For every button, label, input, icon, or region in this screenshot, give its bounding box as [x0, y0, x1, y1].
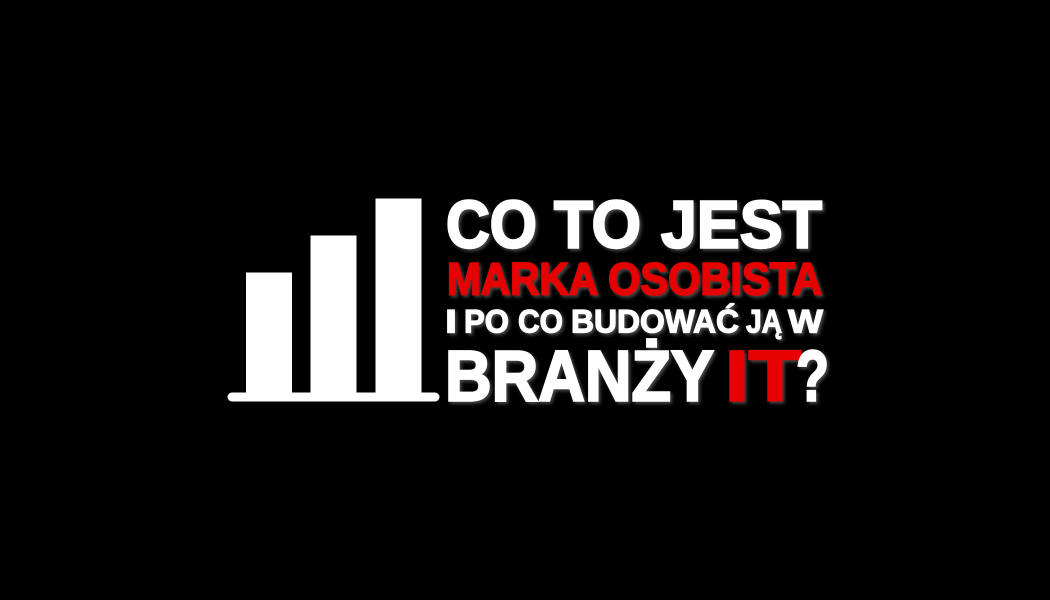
title line 3: BUDOWAĆ: [571, 302, 739, 340]
title line 2: [447, 254, 822, 304]
title line 3: JĄ: [746, 304, 782, 340]
title line 3: PO: [464, 304, 509, 340]
title line 4: ?: [796, 338, 829, 416]
title line 3: W: [788, 304, 823, 340]
title line 1: TO: [554, 188, 641, 262]
title line 3: CO: [518, 304, 563, 340]
title line 3: [445, 302, 823, 340]
title line 1: CO: [446, 188, 537, 262]
title line 3: I: [445, 304, 457, 340]
title line 1: JEST: [661, 188, 822, 262]
icon: bar chart: [228, 198, 440, 402]
title line 2: OSOBISTA: [608, 254, 822, 304]
title line 4: BRANŻY: [445, 338, 714, 416]
title line 1: [446, 188, 822, 262]
title line 4: IT: [725, 338, 801, 416]
title: [445, 188, 829, 416]
title line 2: MARKA: [447, 254, 598, 304]
